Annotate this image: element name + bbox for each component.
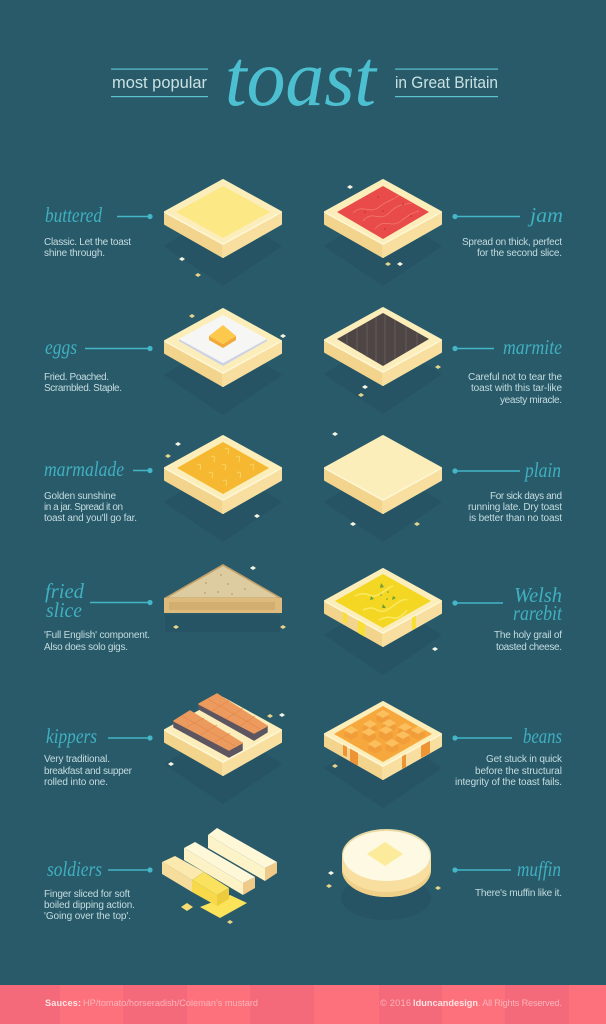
text: buttered: shine through.: [44, 248, 105, 259]
panel: buttered: [44, 180, 282, 286]
toast: marmalade: [164, 436, 282, 542]
text: marmite: [468, 372, 562, 406]
heading: fried slice: [45, 579, 84, 622]
toast: beans: [324, 702, 442, 808]
crumbs: muffin: [326, 871, 441, 890]
text: beans: [455, 754, 563, 788]
text: fried slice: Also does solo gigs.: [44, 642, 128, 653]
text: marmalade: Golden sunshine: [44, 491, 116, 502]
soldier front with yolk: [162, 856, 229, 906]
soldier back: [208, 828, 277, 881]
footer sauces: Sauces:: [45, 998, 81, 1008]
text: jam: Spread on thick, perfect: [462, 237, 562, 248]
heading: buttered: buttered: [45, 203, 102, 227]
crumbs: fried slice: [173, 566, 286, 629]
soldier middle: [184, 842, 255, 895]
panel: marmite: [324, 308, 562, 414]
crumbs: soldiers: [227, 920, 233, 924]
text: eggs: [44, 372, 122, 394]
text: fried slice: 'Full English' component.: [44, 630, 150, 641]
kipper back: [199, 694, 267, 740]
heading: Welsh rarebit: Welsh: [514, 583, 562, 607]
heading: marmalade: marmalade: [44, 457, 124, 481]
connector: buttered: [117, 214, 153, 219]
text: fried slice: [44, 630, 150, 653]
crumbs: Welsh rarebit: [432, 647, 438, 651]
heading: Welsh rarebit: [513, 583, 563, 625]
text: kippers: Very traditional.: [44, 754, 110, 765]
crumbs: beans: [332, 764, 338, 768]
connector: beans: [452, 735, 512, 741]
panel: marmalade: [44, 436, 282, 542]
beans: [344, 710, 425, 754]
connector: jam: [452, 214, 520, 219]
text: plain: running late. Dry toast: [468, 502, 562, 513]
footer copyright: © 2016: [380, 998, 411, 1008]
text: marmite: yeasty miracle.: [500, 395, 562, 406]
panel: beans: [324, 702, 563, 808]
connector: plain: [452, 468, 520, 474]
text: buttered: [44, 237, 131, 259]
yolk puddle: [181, 895, 247, 918]
panel: jam: [324, 180, 563, 286]
heading: marmite: marmite: [503, 335, 562, 359]
text: kippers: breakfast and supper: [44, 766, 133, 777]
text: soldiers: boiled dipping action.: [44, 900, 135, 911]
text: plain: is better than no toast: [469, 513, 562, 524]
heading: jam: jam: [527, 203, 563, 227]
crumbs: buttered: [179, 257, 201, 277]
panel: Welsh rarebit: [324, 569, 563, 675]
footer copyright: lduncandesign: [413, 998, 478, 1008]
text: kippers: [44, 754, 133, 788]
panel: fried slice: [44, 564, 286, 653]
heading: fried slice: slice: [46, 598, 82, 622]
heading: kippers: kippers: [46, 724, 97, 748]
crumbs: kippers: [168, 713, 285, 766]
text: beans: before the structural: [475, 766, 562, 777]
footer copyright: [380, 998, 562, 1008]
title left rules and text: [111, 68, 208, 97]
toast: kippers: [164, 698, 282, 804]
toast: jam: [324, 180, 442, 286]
muffin: [342, 829, 431, 897]
text: marmalade: [44, 491, 137, 524]
connector: marmite: [452, 346, 494, 351]
heading: Welsh rarebit: rarebit: [513, 601, 563, 625]
text: eggs: Fried. Poached.: [44, 372, 109, 383]
text: soldiers: 'Going over the top'.: [44, 911, 131, 922]
text: marmalade: in a jar. Spread it on: [44, 502, 123, 513]
footer stripes: [0, 985, 606, 1024]
heading: soldiers: soldiers: [47, 857, 102, 881]
toast: fried slice: [164, 564, 282, 613]
connector: soldiers: [108, 867, 153, 873]
crumbs: eggs: [189, 314, 286, 338]
title right rules and text: in Great Britain: [395, 74, 498, 92]
panel: muffin: [326, 829, 562, 920]
text: marmalade: toast and you'll go far.: [44, 513, 137, 524]
title right rules and text: [395, 68, 498, 97]
text: muffin: There's muffin like it.: [475, 888, 562, 899]
heading: eggs: eggs: [45, 335, 77, 359]
text: marmite: toast with this tar-like: [471, 383, 562, 394]
footer sauces: HP/tomato/horseradish/Coleman's mustard: [83, 998, 258, 1008]
title: [111, 35, 498, 123]
text: soldiers: Finger sliced for soft: [44, 889, 130, 900]
text: Welsh rarebit: [494, 630, 562, 653]
heading: beans: beans: [523, 724, 562, 748]
text: jam: for the second slice.: [477, 248, 562, 259]
crumbs: marmite: [358, 365, 441, 397]
text: Welsh rarebit: toasted cheese.: [496, 642, 562, 653]
text: beans: integrity of the toast fails.: [455, 777, 562, 788]
toast: buttered: [164, 180, 282, 286]
title left rules and text: most popular: [112, 74, 207, 92]
crumbs: jam: [347, 185, 403, 266]
text: beans: Get stuck in quick: [486, 754, 563, 765]
shadow: fried slice: [165, 615, 280, 632]
text: plain: For sick days and: [490, 491, 562, 502]
footer copyright: . All Rights Reserved.: [478, 998, 562, 1008]
crumbs: marmalade: [165, 442, 260, 518]
kipper front: [174, 711, 242, 757]
crumbs: plain: [332, 432, 420, 526]
toast: marmite: [324, 308, 442, 414]
connector: fried slice: [90, 600, 153, 605]
text: buttered: Classic. Let the toast: [44, 237, 131, 248]
toast: Welsh rarebit: [324, 569, 442, 675]
connector: marmalade: [133, 468, 153, 473]
text: soldiers: [44, 889, 135, 922]
panel: eggs: [44, 309, 286, 415]
heading: plain: plain: [523, 458, 561, 482]
egg yolk: [209, 325, 236, 348]
connector: kippers: [108, 735, 153, 741]
panel: plain: [324, 432, 562, 542]
heading: muffin: muffin: [517, 857, 561, 881]
text: marmite: Careful not to tear the: [468, 372, 562, 383]
connector: muffin: [452, 867, 511, 873]
panel: soldiers: [44, 828, 277, 924]
muffin shadow: [341, 876, 431, 920]
text: kippers: rolled into one.: [44, 777, 108, 788]
text: plain: [468, 491, 562, 524]
connector: eggs: [85, 346, 153, 351]
title word toast: toast: [225, 35, 378, 123]
panel: kippers: [44, 694, 285, 804]
text: Welsh rarebit: The holy grail of: [494, 630, 562, 641]
text: eggs: Scrambled. Staple.: [44, 383, 122, 394]
toast: eggs: [164, 309, 282, 415]
heading: fried slice: fried: [45, 579, 84, 603]
connector: Welsh rarebit: [452, 600, 503, 606]
text: jam: [462, 237, 562, 259]
footer: [0, 985, 606, 1024]
toast: plain: [324, 436, 442, 542]
